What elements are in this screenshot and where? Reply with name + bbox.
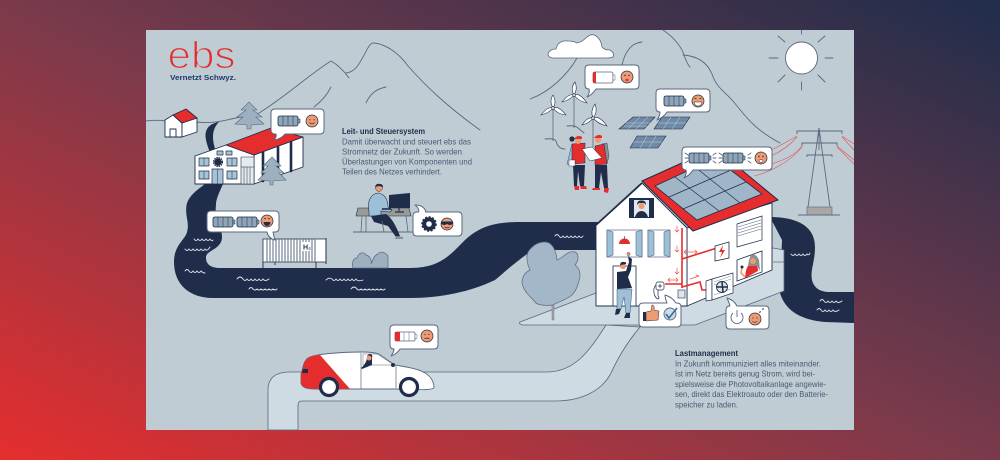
gear on hall: [214, 158, 222, 166]
bubble: wind battery low: [585, 65, 639, 97]
red roof: [642, 148, 778, 231]
sun: [769, 30, 833, 90]
energy flow arrows: [668, 226, 699, 282]
bubble: desk gear and sunglasses: [413, 205, 462, 236]
text: Leit- und Steuersystem: Leit- und Steuersystem: [342, 126, 425, 136]
bubble: standby and sleeping face: z: [762, 306, 764, 311]
logo: ebs: [168, 35, 236, 77]
river: right: [770, 217, 854, 323]
small house: [165, 109, 197, 137]
H2 container: H₂: [303, 244, 311, 252]
text: Lastmanagement: [675, 348, 828, 410]
bubble: solar battery full: [656, 89, 710, 120]
house left eave: [596, 183, 642, 225]
house plinth: [519, 248, 784, 325]
meter: [678, 290, 685, 298]
heat pump: [706, 273, 733, 301]
bubble: roof batteries: [682, 147, 772, 178]
background panel: [146, 30, 854, 430]
road: [268, 325, 640, 430]
house: [596, 148, 778, 306]
roof solar panels: [655, 158, 762, 220]
river: upper stream: [206, 122, 219, 155]
energy lines: [665, 228, 717, 290]
text: Lastmanagement: speicher zu laden.: [675, 400, 738, 410]
bubble: standby and sleeping face: [726, 298, 769, 329]
mountain outlines: [146, 30, 780, 143]
solar park: [619, 117, 690, 148]
control hall building: [195, 128, 303, 184]
bubble: standby and sleeping face: z: [759, 309, 761, 314]
bushes: [352, 252, 388, 268]
power wires: [754, 136, 854, 176]
attic window with person: [629, 198, 654, 218]
text: Lastmanagement: Ist im Netz bereits genug Strom, wird bei-: [675, 370, 815, 379]
right window with shutters: [648, 230, 670, 257]
workers: [567, 135, 609, 193]
door: [613, 266, 636, 306]
text: Lastmanagement: Lastmanagement: [675, 348, 738, 358]
text: Leit- und Steuersystem: Damit überwacht und steuert ebs das: [342, 138, 471, 146]
front window with lamp: [607, 230, 642, 257]
bubble: container batteries: [207, 211, 279, 240]
desk worker: [353, 184, 413, 239]
text: Lastmanagement: spielsweise die Photovoltaikanlage angewie-: [675, 380, 826, 389]
bubble: car battery low: [390, 325, 438, 356]
text: Leit- und Steuersystem: [342, 126, 472, 176]
bubble: thumbs up and check: [639, 295, 681, 327]
bubble: hall battery: [271, 109, 324, 140]
text: Leit- und Steuersystem: Überlastungen von Komponenten und: [342, 156, 472, 166]
window with woman: [737, 251, 762, 281]
louvre window: [737, 216, 762, 247]
car: [301, 352, 434, 396]
big tree: [522, 242, 580, 320]
wind turbines: [541, 82, 607, 149]
waving person: [615, 252, 632, 318]
fuse box with lightning: [715, 242, 729, 261]
power pylon: [797, 128, 842, 215]
text: Leit- und Steuersystem: Stromnetz der Zukunft. So werden: [342, 148, 462, 156]
river: left and middle: [174, 184, 600, 298]
text: Leit- und Steuersystem: Teilen des Netzes verhindert.: [342, 168, 442, 176]
text: Lastmanagement: sen, direkt das Elektroauto oder den Batterie-: [675, 390, 828, 399]
H2 container: [263, 238, 326, 268]
tree behind hall: [235, 102, 264, 129]
logo: Vernetzt Schwyz.: [170, 73, 236, 82]
wallbox charger: [654, 282, 664, 299]
car wheels: [320, 378, 418, 396]
tree in front of hall: [258, 157, 286, 185]
water waves: [185, 234, 842, 312]
cloud: [548, 35, 614, 58]
text: Lastmanagement: In Zukunft kommuniziert alles miteinander.: [675, 360, 821, 368]
